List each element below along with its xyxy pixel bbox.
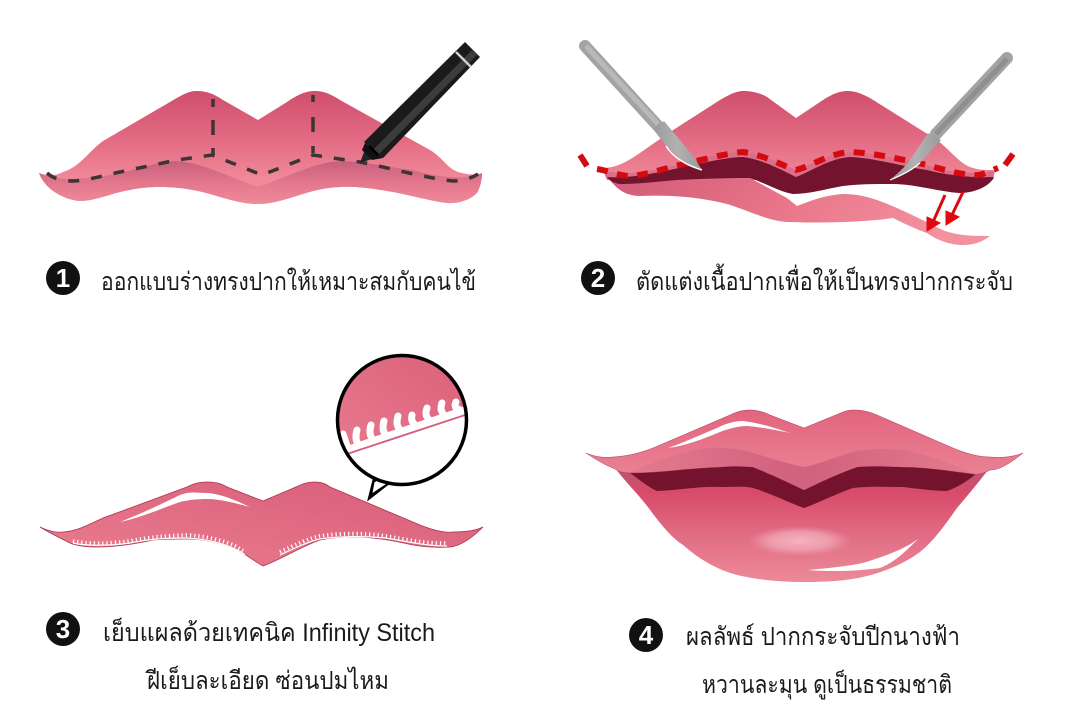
panel: step 4 illustration <box>586 410 1023 582</box>
step 2 caption <box>581 261 1013 296</box>
inner lip band <box>603 152 995 180</box>
number badge 3: 3 <box>56 614 70 644</box>
dark inner mouth <box>607 157 994 194</box>
caption text 3 line 2: ฝีเย็บละเอียด ซ่อนปมไหม <box>145 665 389 695</box>
lower lip <box>615 468 988 582</box>
sutured lips <box>40 482 483 566</box>
number badge 4 <box>629 618 663 652</box>
upper lip after cut <box>603 91 993 177</box>
caption text 2: ตัดแต่งเนื้อปากเพื่อให้เป็นทรงปากกระจับ <box>636 263 1013 296</box>
step 4 caption <box>629 618 960 700</box>
number badge 3 <box>46 612 80 646</box>
dashed red cut line <box>580 152 1013 176</box>
lower lip band <box>39 161 482 204</box>
lips outline for marking <box>39 91 482 204</box>
upper lip inner band <box>630 448 973 490</box>
number badge 1: 1 <box>56 263 70 293</box>
highlight <box>120 492 250 522</box>
arrows: removal direction <box>927 192 963 231</box>
number badge 1 <box>46 261 80 295</box>
dark inner mouth <box>626 450 980 508</box>
caption text 4 line 2: หวานละมุน ดูเป็นธรรมชาติ <box>702 669 952 700</box>
step 1 caption <box>46 261 476 296</box>
number badge 2 <box>581 261 615 295</box>
panel: step 1 illustration <box>39 42 482 204</box>
glow highlight <box>748 526 852 556</box>
lower highlight <box>808 539 918 571</box>
caption text 4 line 1: ผลลัพธ์ ปากกระจับปีกนางฟ้า <box>686 623 960 651</box>
icon: right scalpel <box>890 58 1007 180</box>
panel: step 2 illustration <box>580 46 1013 245</box>
caption text 1: ออกแบบร่างทรงปากให้เหมาะสมกับคนไข้ <box>101 267 476 296</box>
upper lip <box>586 410 1023 490</box>
magnifier callout bubble <box>336 354 468 502</box>
icon: marker pen <box>360 42 480 163</box>
stitches <box>73 534 447 555</box>
top highlight <box>668 421 790 448</box>
number badge 2: 2 <box>591 263 605 293</box>
caption text 3 line 1: เย็บแผลด้วยเทคนิค Infinity Stitch <box>103 617 435 647</box>
dashed marking lines <box>47 95 478 181</box>
excised lip strip <box>607 176 990 245</box>
icon: left scalpel <box>585 46 702 170</box>
step 3 caption <box>46 612 435 695</box>
panel: step 3 illustration <box>40 350 483 566</box>
number badge 4: 4 <box>639 620 654 650</box>
